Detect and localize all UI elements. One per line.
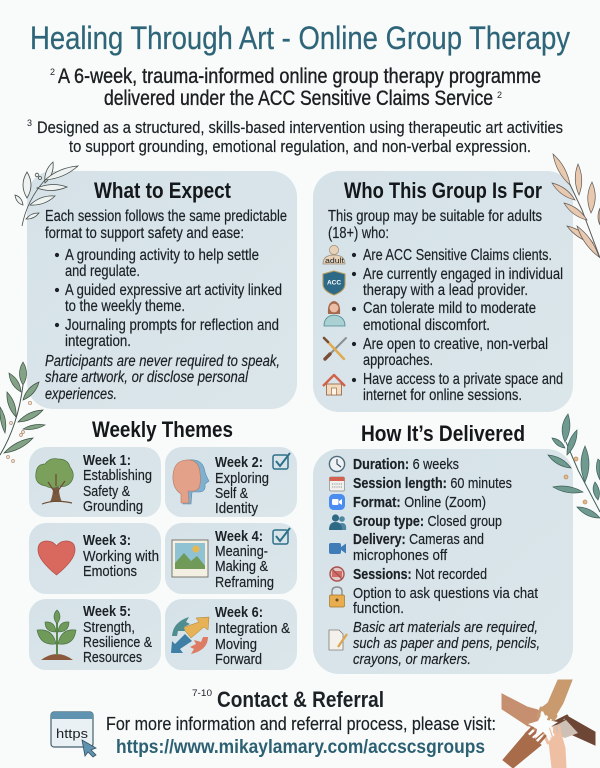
text: week 4: Week 4: bbox=[215, 528, 263, 545]
delivery details bbox=[353, 456, 539, 617]
text: week 3: Working with bbox=[83, 548, 159, 565]
bullet list: emotional discomfort. bbox=[363, 317, 490, 334]
icon: clock bbox=[329, 456, 345, 472]
icon: calendar bbox=[330, 477, 344, 491]
description: 3 bbox=[27, 118, 32, 128]
bullet list: Journaling prompts for reflection and bbox=[65, 317, 279, 334]
decoration: top-left sprig bbox=[15, 162, 78, 226]
bullet list: to the weekly theme. bbox=[65, 298, 185, 315]
text: week 1: Grounding bbox=[83, 498, 143, 515]
text: week 2: Identity bbox=[215, 500, 258, 517]
text: week 2: Week 2: bbox=[215, 454, 263, 471]
text: week 2: Self & bbox=[215, 485, 248, 502]
bullet list: Can tolerate mild to moderate bbox=[363, 300, 536, 317]
panel: how it's delivered bbox=[313, 449, 573, 674]
icon: padlock bbox=[330, 587, 344, 607]
card: week 2 bbox=[165, 447, 297, 517]
hand: top-left bbox=[502, 694, 544, 730]
delivery details: Format: Online (Zoom) bbox=[353, 494, 486, 511]
bullet list: A grounding activity to help settle bbox=[65, 247, 259, 264]
icon: note and pencil bbox=[329, 630, 347, 650]
delivery details: Option to ask questions via chat bbox=[353, 585, 539, 602]
contact heading: Contact & Referral bbox=[217, 687, 384, 712]
icon: head profile bbox=[173, 460, 209, 504]
subtitle bbox=[50, 65, 541, 110]
delivery details: Group type: Closed group bbox=[353, 513, 502, 530]
icon: clinician bbox=[324, 301, 345, 326]
bullet list: Are open to creative, non-verbal bbox=[363, 336, 548, 353]
italic note bbox=[353, 619, 540, 668]
bullet list: Are ACC Sensitive Claims clients. bbox=[363, 247, 552, 264]
intro text: format to support safety and ease: bbox=[45, 225, 244, 242]
text: week 5: Resources bbox=[83, 649, 142, 666]
delivery details: Session length: 60 minutes bbox=[353, 475, 512, 492]
delivery details: Duration: 6 weeks bbox=[353, 456, 459, 473]
intro text bbox=[45, 208, 287, 242]
subtitle: delivered under the ACC Sensitive Claims Service bbox=[104, 87, 493, 110]
icon: art tools bbox=[324, 338, 346, 359]
text: week 1: Establishing bbox=[83, 467, 152, 484]
icon: zoom bbox=[329, 494, 345, 510]
decoration: top-right sprig bbox=[552, 154, 600, 258]
text: week 6: Forward bbox=[215, 651, 262, 668]
heading: weekly themes: Weekly Themes bbox=[92, 417, 233, 442]
icon: heart bbox=[38, 541, 75, 575]
icon: tree bbox=[36, 459, 73, 504]
bullet list bbox=[55, 247, 282, 350]
decoration: bottom-left sprig bbox=[0, 362, 45, 462]
centre gap between hands bbox=[528, 711, 558, 739]
icon: https browser window: https bbox=[56, 727, 88, 741]
bullet list bbox=[352, 247, 563, 404]
hand: bottom bbox=[543, 727, 566, 768]
icon: house bbox=[323, 375, 345, 395]
panel: what to expect bbox=[27, 171, 297, 409]
text: week 6: Integration & bbox=[215, 620, 290, 637]
text: week 3: Week 3: bbox=[83, 532, 131, 549]
icon: people bbox=[329, 514, 346, 530]
illustration: joined hands bbox=[502, 680, 595, 768]
hand: right dark bbox=[552, 716, 595, 745]
delivery details: function. bbox=[353, 600, 404, 617]
text: week 1: Safety & bbox=[83, 483, 130, 500]
hand: bottom-left bbox=[503, 726, 545, 768]
delivery details: Delivery: Cameras and bbox=[353, 531, 484, 548]
bullet list: internet for online sessions. bbox=[363, 387, 522, 404]
contact heading: 7-10 bbox=[192, 688, 212, 698]
card: week 4 bbox=[165, 523, 297, 594]
text: week 5: Resilience & bbox=[83, 634, 152, 651]
heading: who this group is for: Who This Group Is For bbox=[344, 178, 542, 203]
text: week 5: Week 5: bbox=[83, 603, 131, 620]
card: week 6 bbox=[165, 599, 297, 670]
icon: picture bbox=[172, 540, 208, 577]
text: week 2 bbox=[215, 454, 269, 517]
contact text: For more information and referral process, please visit: bbox=[106, 714, 496, 734]
icon: integration arrows bbox=[171, 617, 209, 654]
text: week 4: Reframing bbox=[215, 574, 274, 591]
intro text bbox=[328, 208, 542, 242]
icon: adult: adult bbox=[325, 258, 344, 265]
text: week 2: Exploring bbox=[215, 470, 269, 487]
subtitle: 2 bbox=[50, 67, 55, 77]
description: to support grounding, emotional regulation, and non-verbal expression. bbox=[69, 137, 531, 156]
bullet list: Are currently engaged in individual bbox=[363, 266, 563, 283]
icon: https browser window bbox=[51, 712, 96, 757]
referral link: https://www.mikaylamary.com/accscsgroups bbox=[116, 737, 485, 758]
text: week 1: Week 1: bbox=[83, 452, 131, 469]
text: week 6 bbox=[215, 604, 290, 668]
bullet list: and regulate. bbox=[65, 263, 140, 280]
icon: ACC shield bbox=[323, 271, 345, 295]
intro text: This group may be suitable for adults bbox=[328, 208, 542, 225]
card: week 3 bbox=[29, 523, 161, 594]
decoration: right green sprig bbox=[548, 414, 600, 518]
text: week 5: Strength, bbox=[83, 619, 135, 636]
bullet list: integration. bbox=[65, 333, 131, 350]
intro text: Each session follows the same predictable bbox=[45, 208, 287, 225]
heading: what to expect: What to Expect bbox=[94, 178, 232, 203]
subtitle: 2 bbox=[497, 90, 502, 100]
icon: ACC shield: ACC bbox=[327, 280, 341, 286]
italic note: Participants are never required to speak, bbox=[45, 353, 280, 370]
text: week 1 bbox=[83, 452, 152, 515]
italic note bbox=[45, 353, 280, 403]
text: week 3 bbox=[83, 532, 159, 580]
text: week 4 bbox=[215, 528, 274, 591]
italic note: experiences. bbox=[45, 386, 117, 403]
card: week 5 bbox=[29, 599, 161, 670]
panel: who this group is for bbox=[313, 171, 573, 412]
italic note: such as paper and pens, pencils, bbox=[353, 635, 540, 652]
intro text: (18+) who: bbox=[328, 225, 389, 242]
description bbox=[27, 118, 563, 156]
heading: how it's delivered: How It’s Delivered bbox=[361, 421, 525, 446]
text: week 6: Moving bbox=[215, 636, 257, 653]
text: week 3: Emotions bbox=[83, 563, 137, 580]
hand: right light bbox=[553, 720, 578, 738]
icon: checkbox bbox=[273, 453, 290, 469]
bullet list: therapy with a lead provider. bbox=[363, 282, 528, 299]
text: week 6: Week 6: bbox=[215, 604, 263, 621]
text: week 4: Meaning- bbox=[215, 543, 268, 560]
icon: camera bbox=[329, 543, 346, 554]
text: week 4: Making & bbox=[215, 558, 268, 575]
icon: adult bbox=[323, 245, 345, 265]
bullet list: A guided expressive art activity linked bbox=[65, 282, 282, 299]
card: week 1 bbox=[29, 447, 161, 517]
bullet list: approaches. bbox=[363, 352, 433, 369]
text: week 5 bbox=[83, 603, 152, 666]
icon: checkbox bbox=[273, 528, 290, 544]
delivery details: microphones off bbox=[353, 547, 448, 564]
hand: top bbox=[538, 680, 572, 724]
icon: not recorded bbox=[330, 567, 344, 581]
icon: seedling bbox=[37, 610, 76, 660]
delivery details: Sessions: Not recorded bbox=[353, 566, 487, 583]
italic note: Basic art materials are required, bbox=[353, 619, 538, 636]
italic note: share artwork, or disclose personal bbox=[45, 369, 248, 386]
italic note: crayons, or markers. bbox=[353, 651, 471, 668]
